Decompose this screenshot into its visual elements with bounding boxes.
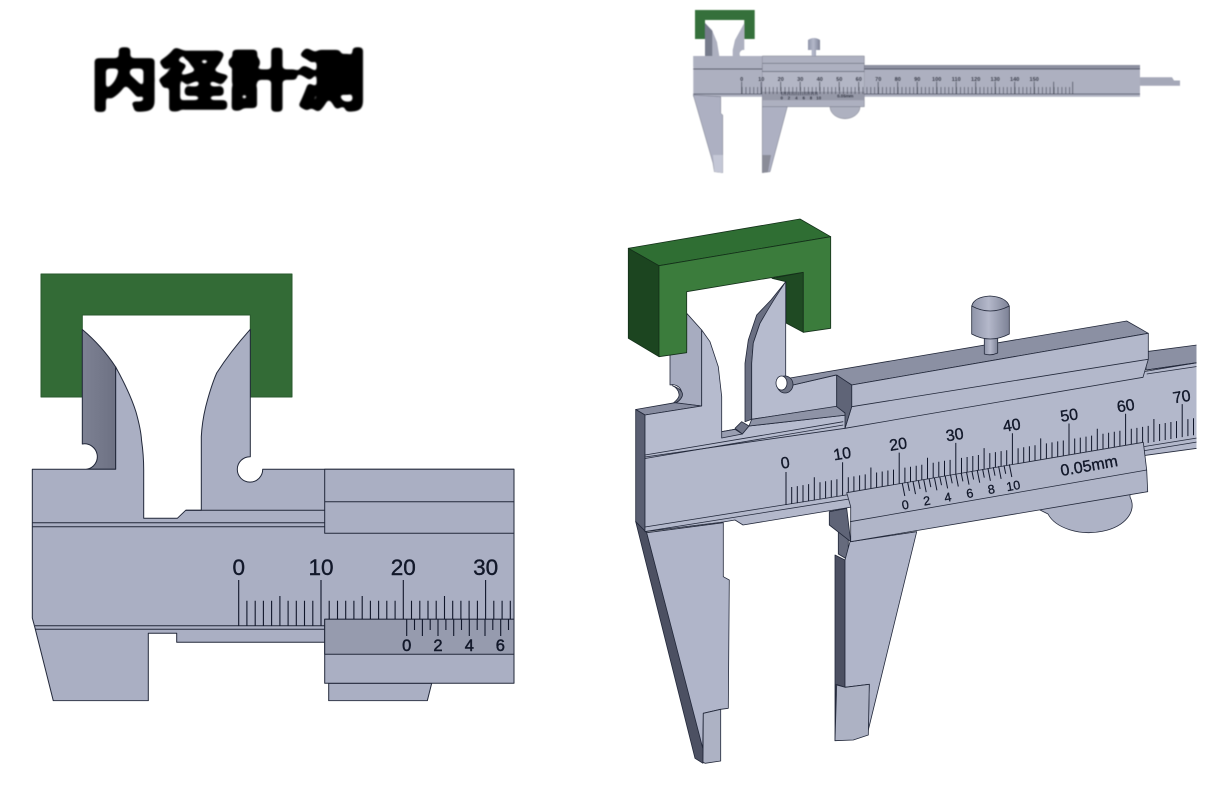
detail: vernier numbers: 4 <box>465 637 474 655</box>
detail: dark inner face of left jaw <box>82 330 116 469</box>
detail: vernier numbers: 0 <box>402 637 411 655</box>
overview: scale numbers: 0 <box>740 77 743 83</box>
detail: vernier ticks <box>407 619 508 636</box>
iso: beam top surface at right <box>1146 345 1197 370</box>
left enlarged caliper detail <box>32 274 514 701</box>
overview: scale numbers: 70 <box>875 77 881 83</box>
detail: lower moving jaw <box>329 683 432 701</box>
iso: fixed upper jaw and body front <box>645 330 847 457</box>
iso: main scale numbers: 50 <box>1059 406 1080 426</box>
overview: scale numbers: 10 <box>758 77 764 83</box>
detail: fixed body and jaws <box>32 329 514 701</box>
overview: vernier numbers: 0.05mm <box>837 94 854 98</box>
iso: vernier numbers: 0 <box>901 498 910 513</box>
iso: thumb knob <box>972 296 1009 339</box>
overview: scale numbers: 130 <box>991 77 1000 83</box>
overview: beam top strip <box>762 65 1140 69</box>
overview: fixed outside jaw <box>693 95 723 173</box>
iso: body top bevel <box>636 403 702 415</box>
iso: moving lower jaw dark edge <box>835 555 845 741</box>
iso: moving upper jaw dark edge <box>745 282 786 422</box>
iso: lower fixed jaw face <box>647 523 729 748</box>
overview: vernier numbers: 2 <box>788 96 791 100</box>
overview: slider <box>762 56 864 107</box>
overview: wheel <box>830 107 860 119</box>
iso: vernier unit label: 0.05mm <box>1059 453 1119 480</box>
overview: scale numbers: 80 <box>895 77 901 83</box>
iso: gauge top face <box>628 219 831 266</box>
detail: main scale numbers: 30 <box>473 555 498 580</box>
detail: green ring gauge <box>41 274 292 397</box>
iso: vernier plate <box>847 442 1148 542</box>
overview: main scale beam <box>693 56 1140 97</box>
overview: fixed jaw tip <box>713 155 723 173</box>
overview: slider lines <box>762 63 864 72</box>
overview: scale numbers: 40 <box>817 77 823 83</box>
iso: lower fixed jaw dark edge <box>636 522 703 763</box>
iso: gauge left face <box>628 248 659 357</box>
iso: vernier plate line <box>850 470 1147 522</box>
iso: chamfer diamond <box>735 422 749 434</box>
overview: vernier plate <box>762 92 864 100</box>
overview: green ring gauge <box>695 10 755 39</box>
detail: slider lower block <box>325 619 514 683</box>
iso: knob top edge <box>972 306 1009 311</box>
iso: body left side <box>636 410 645 532</box>
overview: scale numbers <box>740 77 1039 83</box>
iso: slider front face <box>845 333 1148 428</box>
iso: main scale numbers: 40 <box>1002 416 1022 436</box>
overview: scale numbers: 120 <box>971 77 980 83</box>
iso: slider lower side shadow <box>829 508 851 542</box>
iso: vernier numbers: 6 <box>965 486 974 501</box>
overview: scale numbers: 30 <box>797 77 803 83</box>
overview: slider window <box>762 72 864 92</box>
iso: moving jaw tip <box>835 684 869 741</box>
iso: moving upper jaw <box>752 282 837 419</box>
iso: main scale numbers <box>780 388 1192 473</box>
iso: left notch shading <box>672 386 683 404</box>
iso: main scale numbers: 0 <box>780 454 791 473</box>
overview: vernier numbers: 8 <box>810 96 813 100</box>
overview: scale ticks <box>693 69 1140 94</box>
detail: main scale numbers: 10 <box>308 555 334 580</box>
iso: sliding jaw strip <box>749 406 847 426</box>
right isometric caliper <box>628 219 1197 763</box>
overview: scale numbers: 110 <box>952 77 961 83</box>
overview: vernier numbers: 6 <box>802 96 805 100</box>
iso: main scale numbers: 60 <box>1116 397 1136 416</box>
iso: moving lower jaw face <box>845 532 917 730</box>
detail: main scale numbers: 20 <box>391 555 416 580</box>
detail: main scale numbers: 0 <box>232 555 245 580</box>
overview: vernier numbers <box>780 94 854 100</box>
overview: vernier numbers: 10 <box>816 96 822 100</box>
detail: body groove lines <box>32 510 325 629</box>
iso: green ring gauge <box>628 219 831 357</box>
iso: left upper jaw back face <box>670 313 702 406</box>
overview: scale numbers: 140 <box>1010 77 1019 83</box>
iso: slider front line <box>852 359 1148 407</box>
iso: main scale ticks <box>786 404 1194 505</box>
detail: vernier numbers: 6 <box>496 637 505 655</box>
overview: upper jaws <box>693 23 762 67</box>
iso: jaw bottom step <box>722 429 742 438</box>
overview: moving jaw tip <box>762 155 771 173</box>
overview: scale numbers: 90 <box>914 77 920 83</box>
iso: vernier numbers: 4 <box>943 490 952 505</box>
iso: gauge inner shadow <box>772 272 803 332</box>
iso: slider top face <box>790 321 1148 385</box>
overview: scale numbers: 60 <box>856 77 862 83</box>
iso: main scale numbers: 70 <box>1172 388 1192 407</box>
iso: vernier numbers <box>901 478 1021 513</box>
iso: beam <box>645 363 1197 532</box>
detail: vernier numbers <box>402 637 505 655</box>
overview: depth rod <box>1140 77 1180 86</box>
detail: main scale numbers <box>232 555 498 580</box>
iso: thumb knob stem <box>984 338 998 355</box>
iso: vernier ticks <box>902 464 1012 496</box>
overview: scale numbers: 50 <box>836 77 842 83</box>
iso: main scale numbers: 20 <box>888 435 909 455</box>
iso: vernier numbers: 10 <box>1005 478 1021 494</box>
detail: main scale ticks <box>239 580 510 626</box>
small overview caliper <box>693 10 1180 173</box>
detail: vernier plate <box>325 619 514 654</box>
iso: main scale numbers: 10 <box>832 445 853 464</box>
iso: main scale numbers: 30 <box>945 426 965 445</box>
detail: vernier numbers: 2 <box>433 637 443 655</box>
title: 内径計測 <box>90 29 366 123</box>
iso: right notch opening <box>776 376 787 390</box>
overview: scale numbers: 150 <box>1030 77 1039 83</box>
iso: groove lines <box>645 363 1197 532</box>
overview: scale numbers: 100 <box>932 77 941 83</box>
overview: vernier numbers: 0 <box>780 96 783 100</box>
iso: right notch back wall <box>777 376 793 393</box>
overview: vernier numbers: 4 <box>795 96 798 100</box>
iso: slider chamfer <box>837 375 852 428</box>
overview: scale numbers: 20 <box>778 77 784 83</box>
iso: moving jaw connector <box>838 522 848 560</box>
iso: vernier numbers: 2 <box>922 494 931 509</box>
overview: thumb knob <box>808 38 820 56</box>
iso: wheel <box>1040 490 1132 533</box>
overview: moving outside jaw <box>762 107 787 173</box>
iso: fixed jaw tip <box>703 709 721 763</box>
detail: slider upper block <box>325 469 514 533</box>
iso: vernier numbers: 8 <box>987 482 996 497</box>
iso: gauge front face <box>659 237 831 357</box>
overview: dark jaw side <box>705 23 712 56</box>
